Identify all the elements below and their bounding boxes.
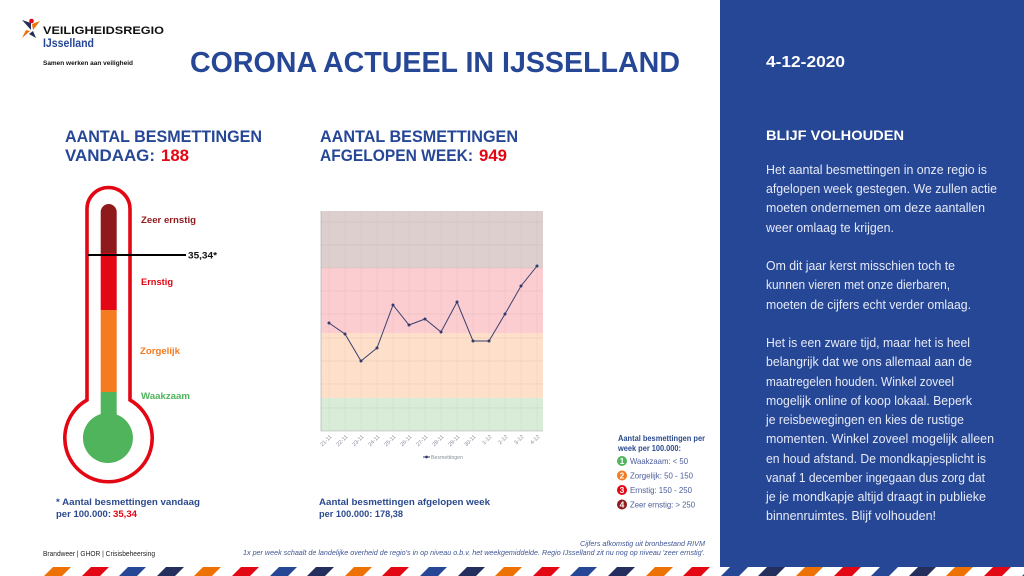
source note [243, 539, 706, 557]
sidebar heading: BLIJF VOLHOUDEN [766, 127, 904, 143]
chart severity bands [321, 211, 543, 431]
x-axis date labels [320, 434, 541, 448]
x-axis date labels: 2-12 [497, 434, 509, 446]
heading: infections today: VANDAAG: [65, 146, 155, 165]
level: ernstig [101, 253, 117, 310]
heading: infections past week: AANTAL BESMETTINGEN [320, 127, 518, 146]
sidebar body text: kunnen vieren met onze dierbaren, [766, 277, 950, 292]
thermometer outline [65, 188, 152, 482]
x-axis date labels: 22-11 [336, 434, 349, 448]
sidebar body text: momenten. Winkel zoveel mogelijk alleen [766, 431, 994, 446]
icon: logo mark [22, 19, 40, 38]
marker line with value [88, 250, 217, 262]
thermometer labels: Zeer ernstig [141, 215, 196, 226]
sidebar body text: je reisbewegingen en kies de rustige [765, 412, 964, 427]
source note: Cijfers afkomstig uit bronbestand RIVM [580, 539, 706, 548]
panel: date and message sidebar [720, 0, 1024, 567]
legend item: zorgelijk: 2 [620, 470, 625, 480]
x-axis date labels: 25-11 [384, 434, 397, 448]
x-axis date labels: 26-11 [400, 434, 413, 448]
sidebar body text: mogelijk online of koop lokaal. Beperk [766, 393, 972, 408]
note: per 100.000 today [56, 497, 200, 520]
sidebar body text: je je mondkapje altijd draagt in publieke [765, 489, 986, 504]
sidebar body text: Het aantal besmettingen in onze regio is [766, 162, 987, 177]
x-axis date labels: 29-11 [448, 434, 461, 448]
heading: infections today: 188 [161, 146, 189, 165]
date: 4-12-2020 [766, 54, 845, 71]
legend: weekly thresholds: week per 100.000: [617, 444, 681, 453]
legend item: waakzaam: Waakzaam: < 50 [630, 456, 688, 466]
x-axis date labels: 28-11 [432, 434, 445, 448]
heading: infections today [65, 127, 262, 165]
note: per 100.000 past week: per 100.000: 178,38 [319, 509, 403, 520]
line chart [320, 211, 543, 461]
x-axis date labels: 4-12 [529, 434, 541, 446]
title: CORONA ACTUEEL IN IJSSELLAND [190, 47, 680, 79]
level: zeer ernstig [101, 204, 117, 253]
note: per 100.000 past week [319, 497, 491, 520]
thermometer labels: Ernstig [141, 277, 173, 288]
marker line with value: 35,34* [188, 250, 217, 262]
heading: infections past week: AFGELOPEN WEEK: [320, 146, 473, 165]
level: waakzaam [83, 392, 133, 463]
sidebar body text [765, 162, 997, 523]
x-axis date labels: 30-11 [464, 434, 477, 448]
sidebar body text: moeten ondernemen om deze aantallen [766, 200, 985, 215]
sidebar body text: en houd afstand. De mondkapjesplicht is [766, 451, 986, 466]
sidebar body text: Het is een zware tijd, maar het is heel [766, 335, 970, 350]
thermometer [65, 188, 217, 482]
legend item: ernstig: 3 [620, 485, 625, 495]
thermometer labels: Waakzaam [141, 391, 190, 402]
x-axis date labels: 27-11 [416, 434, 429, 448]
airmail stripe border [44, 567, 1024, 576]
sidebar body text: Om dit jaar kerst misschien toch te [766, 258, 955, 273]
note: per 100.000 today: * Aantal besmettingen vandaag [56, 497, 200, 508]
source note: 1x per week schaalt de landelijke overheid de regio's in op niveau o.b.v. het weekgemiddelde. Regio IJsselland zit nu nog op niveau 'zeer ernstig'. [243, 548, 705, 557]
sidebar body text: weer omlaag te krijgen. [765, 220, 894, 235]
logo: VEILIGHEIDSREGIO [43, 25, 164, 37]
legend item: waakzaam: 1 [620, 456, 625, 466]
sidebar body text: maatregelen houden. Winkel zoveel [766, 374, 954, 389]
logo: IJsselland [43, 38, 94, 50]
note: per 100.000 past week: Aantal besmettingen afgelopen week [319, 497, 491, 508]
heading: infections past week [320, 127, 518, 165]
chart legend: Besmettingen [431, 455, 463, 461]
thermometer labels: Zorgelijk [140, 346, 181, 357]
x-axis date labels: 3-12 [513, 434, 525, 446]
x-axis date labels: 24-11 [368, 434, 381, 448]
data line: besmettingen [328, 264, 538, 362]
note: per 100.000 today: per 100.000: [56, 509, 111, 520]
legend item: zeer ernstig: Zeer ernstig: > 250 [630, 500, 695, 510]
sidebar body text: vanaf 1 december ingegaan dus zorg dat [766, 470, 985, 485]
x-axis date labels: 23-11 [352, 434, 365, 448]
legend item: zorgelijk: Zorgelijk: 50 - 150 [630, 470, 693, 480]
legend item: zeer ernstig: 4 [620, 500, 625, 510]
sidebar body text: binnenruimtes. Blijf volhouden! [766, 508, 936, 523]
heading: infections past week: 949 [479, 146, 507, 165]
legend: weekly thresholds: Aantal besmettingen per [618, 434, 705, 443]
x-axis date labels: 21-11 [320, 434, 333, 448]
sidebar body text: moeten de cijfers echt verder omlaag. [766, 297, 971, 312]
logo [22, 19, 164, 67]
sidebar body text: belangrijk dat we ons allemaal aan de [766, 354, 972, 369]
note: per 100.000 today: 35,34 [113, 509, 138, 520]
legend item: ernstig: Ernstig: 150 - 250 [630, 485, 692, 495]
logo: Samen werken aan veiligheid [43, 60, 133, 67]
legend: weekly thresholds [617, 434, 705, 510]
thermometer labels [140, 215, 196, 402]
level: zorgelijk [101, 310, 117, 392]
heading: infections today: AANTAL BESMETTINGEN [65, 127, 262, 146]
x-axis date labels: 1-12 [481, 434, 493, 446]
sidebar body text: afgelopen week gestegen. We zullen actie [766, 181, 997, 196]
footer organisations: Brandweer | GHOR | Crisisbeheersing [43, 549, 155, 558]
